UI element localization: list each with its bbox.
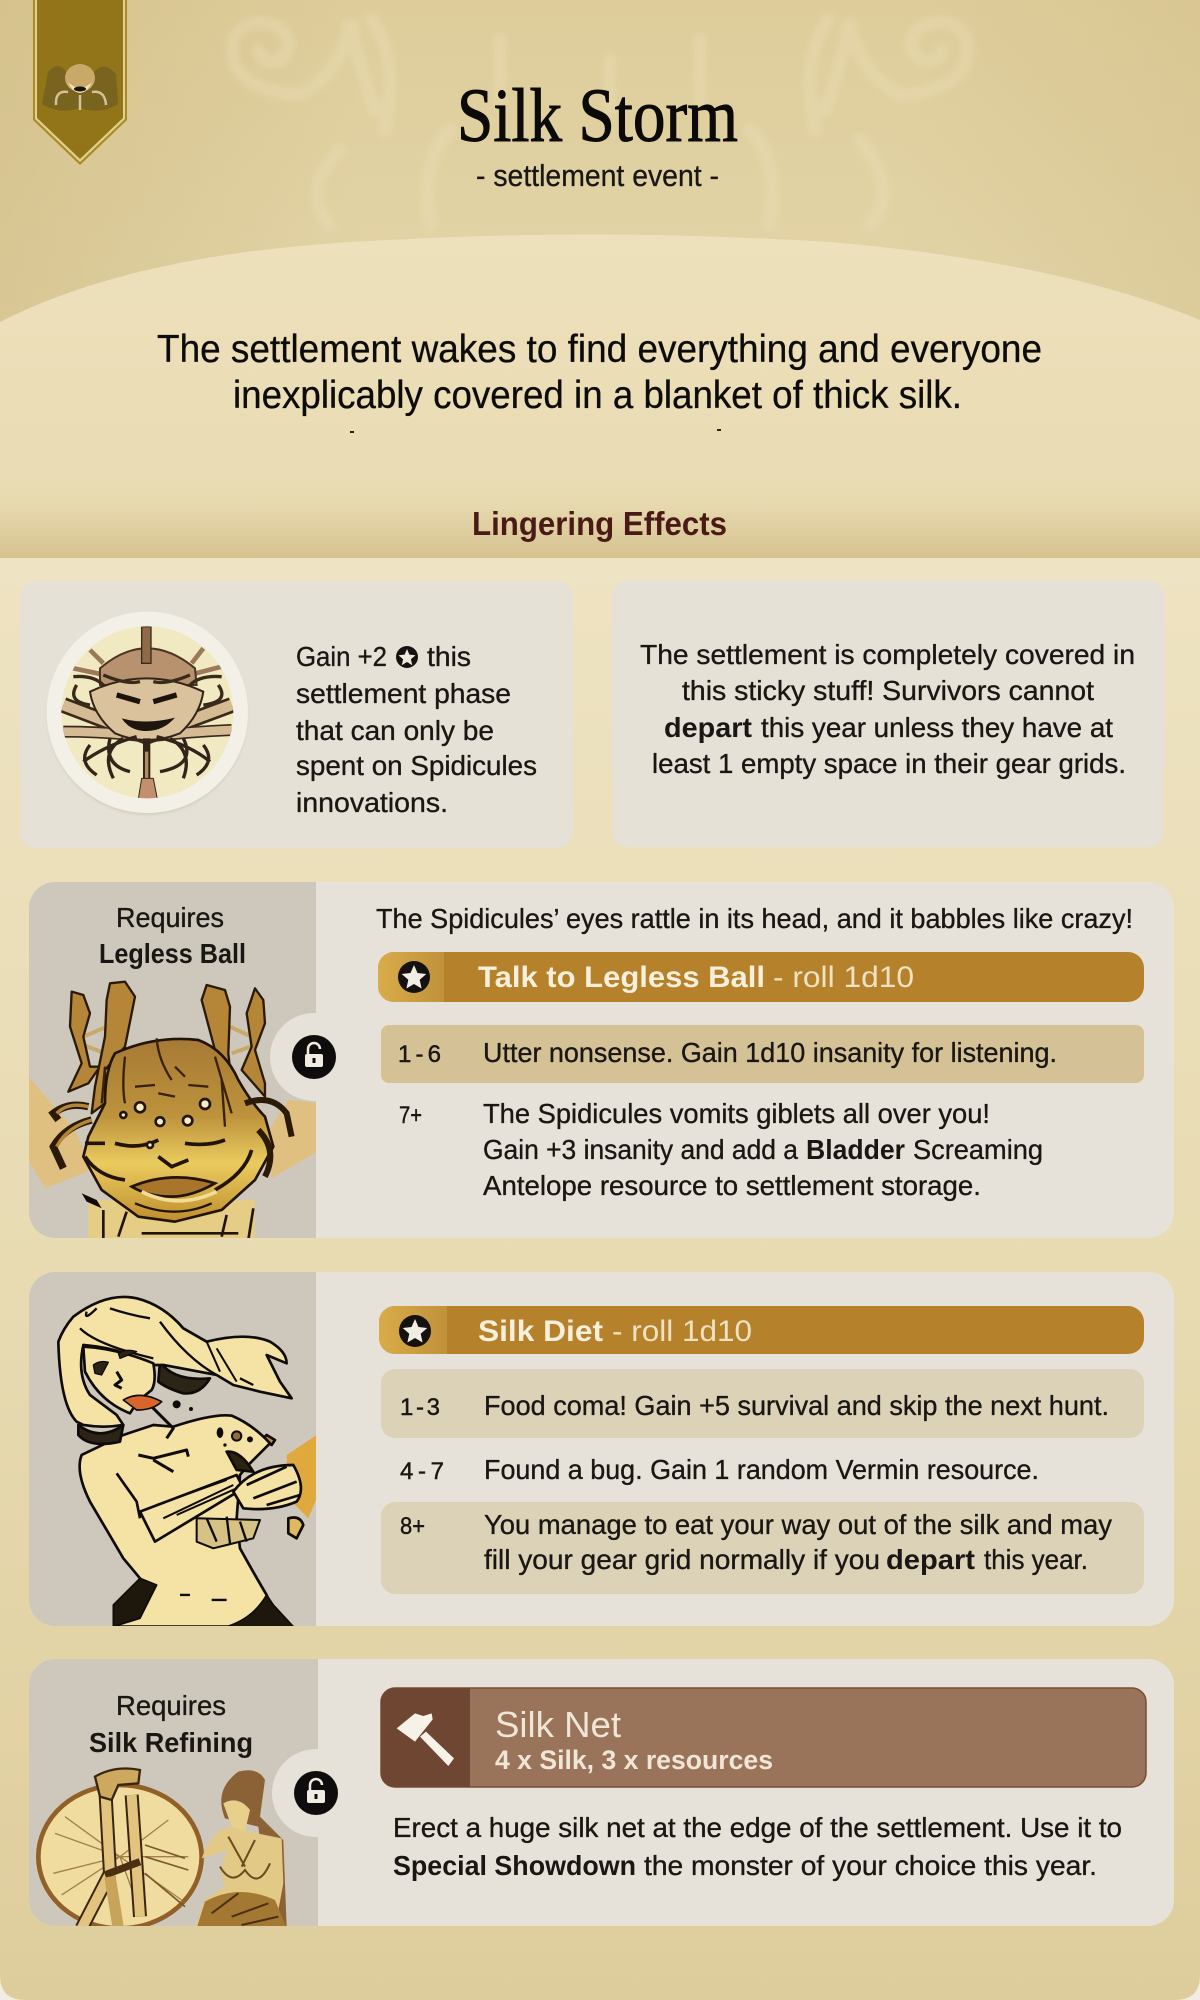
result row: 8+: depart: [886, 1544, 975, 1575]
icon: spider emblem: [42, 64, 118, 111]
requirement label: Requires: [116, 1690, 226, 1721]
icon: lock with bump: [270, 1013, 358, 1101]
action bar: Talk to Legless Ball: [378, 952, 1144, 1002]
icon: survival star: [399, 1315, 431, 1347]
craft description: the monster of your choice this year.: [644, 1850, 1097, 1881]
panel: depart restriction: depart: [664, 712, 752, 743]
result row: 8+: fill your gear grid normally if you: [484, 1544, 880, 1575]
effect text: this: [427, 641, 471, 672]
result row: 7+: Gain +3 insanity and add a: [483, 1134, 798, 1165]
flavour text: The Spidicules’ eyes rattle in its head, and it babbles like crazy!: [376, 903, 1133, 934]
result row: 8+: this year.: [984, 1544, 1088, 1575]
illustration: woman eating silk: [58, 1297, 317, 1627]
subtitle: - settlement event -: [476, 158, 719, 193]
panel: depart restriction: this sticky stuff! Survivors cannot: [682, 675, 1094, 706]
effect text: Gain +2: [296, 641, 387, 672]
arched intro panel: [0, 234, 1200, 558]
craft bar: Silk Net: Silk Net: [495, 1704, 621, 1745]
result row: 7+: 7+: [399, 1102, 422, 1129]
icon: lock with bump: [272, 1749, 360, 1837]
panel: depart restriction: [612, 580, 1164, 847]
requirement label: Requires: [116, 902, 224, 933]
result row: 7+: Screaming: [913, 1134, 1043, 1165]
result row: 7+: Antelope resource to settlement storage.: [483, 1170, 981, 1201]
craft description: Erect a huge silk net at the edge of the settlement. Use it to: [393, 1812, 1122, 1843]
result row: 1-3: 1 - 3: [400, 1394, 440, 1421]
section heading: Lingering Effects: Lingering Effects: [472, 505, 727, 542]
panel: depart restriction: The settlement is completely covered in: [640, 639, 1135, 670]
craft description: [393, 1812, 1122, 1881]
requirement label: [99, 902, 246, 969]
intro text: [157, 328, 1042, 417]
result row: 7+: [399, 1098, 1043, 1201]
effect text: settlement phase: [296, 678, 511, 709]
action bar: Silk Diet: Silk Diet: [478, 1315, 603, 1348]
requirement label: Silk Refining: [89, 1727, 253, 1758]
icon: survival star: [398, 961, 430, 993]
effect text: innovations.: [296, 787, 448, 818]
requirement label: [89, 1690, 253, 1758]
parchment background: [0, 0, 1200, 330]
effect text: that can only be: [296, 715, 494, 746]
panel: token effect: [20, 581, 573, 848]
result row: 1-6: [381, 1025, 1144, 1083]
panel: Silk Diet: [29, 1272, 1174, 1627]
result row: 1-6: 1 - 6: [398, 1041, 441, 1068]
panel: depart restriction: this year unless they have at: [761, 712, 1113, 743]
card corners: [0, 1975, 1200, 2000]
title: Silk Storm: [457, 74, 738, 158]
result row: 8+: 8+: [400, 1513, 425, 1540]
craft bar: Silk Net: 4 x Silk, 3 x resources: [495, 1745, 773, 1775]
lower background: [0, 558, 1200, 2000]
result row: 7+: Bladder: [806, 1134, 905, 1165]
icon: survival star: [396, 646, 418, 668]
action bar: Talk to Legless Ball: Talk to Legless Ball: [478, 961, 765, 994]
panel: depart restriction: least 1 empty space in their gear grids.: [652, 748, 1126, 779]
result row: 4-7: Found a bug. Gain 1 random Vermin resource.: [484, 1454, 1039, 1485]
icon: hammer: [397, 1713, 454, 1766]
intro text: The settlement wakes to find everything and everyone: [157, 328, 1042, 371]
panel: Silk Net: [29, 1659, 1174, 1928]
craft description: Special Showdown: [393, 1850, 636, 1881]
action bar: Talk to Legless Ball: - roll 1d10: [773, 961, 914, 994]
panel: Talk to Legless Ball: [28, 882, 1174, 1240]
effect text: [296, 641, 537, 818]
banner tab: [33, 0, 127, 165]
intro text: inexplicably covered in a blanket of thick silk.: [233, 374, 962, 417]
decorative watermark ornament: [232, 20, 968, 225]
small specks: [350, 429, 721, 433]
result row: 8+: [381, 1502, 1144, 1594]
result row: 8+: You manage to eat your way out of the silk and may: [484, 1509, 1112, 1540]
action bar: Silk Diet: [379, 1306, 1144, 1354]
result row: 1-6: Utter nonsense. Gain 1d10 insanity for listening.: [483, 1037, 1057, 1068]
illustration: legless ball: [28, 982, 320, 1240]
craft bar: Silk Net: [381, 1688, 1146, 1787]
requirement label: Legless Ball: [99, 938, 246, 969]
result row: 4-7: 4 - 7: [400, 1458, 444, 1485]
effect text: spent on Spidicules: [296, 750, 537, 781]
result row: 1-3: Food coma! Gain +5 survival and skip the next hunt.: [484, 1390, 1109, 1421]
action bar: Silk Diet: - roll 1d10: [612, 1315, 752, 1348]
icon: spidicules portrait token: [47, 612, 248, 815]
result row: 1-3: [381, 1369, 1144, 1438]
result row: 7+: The Spidicules vomits giblets all over you!: [483, 1098, 990, 1129]
illustration: spinning wheel and woman: [38, 1768, 287, 1928]
